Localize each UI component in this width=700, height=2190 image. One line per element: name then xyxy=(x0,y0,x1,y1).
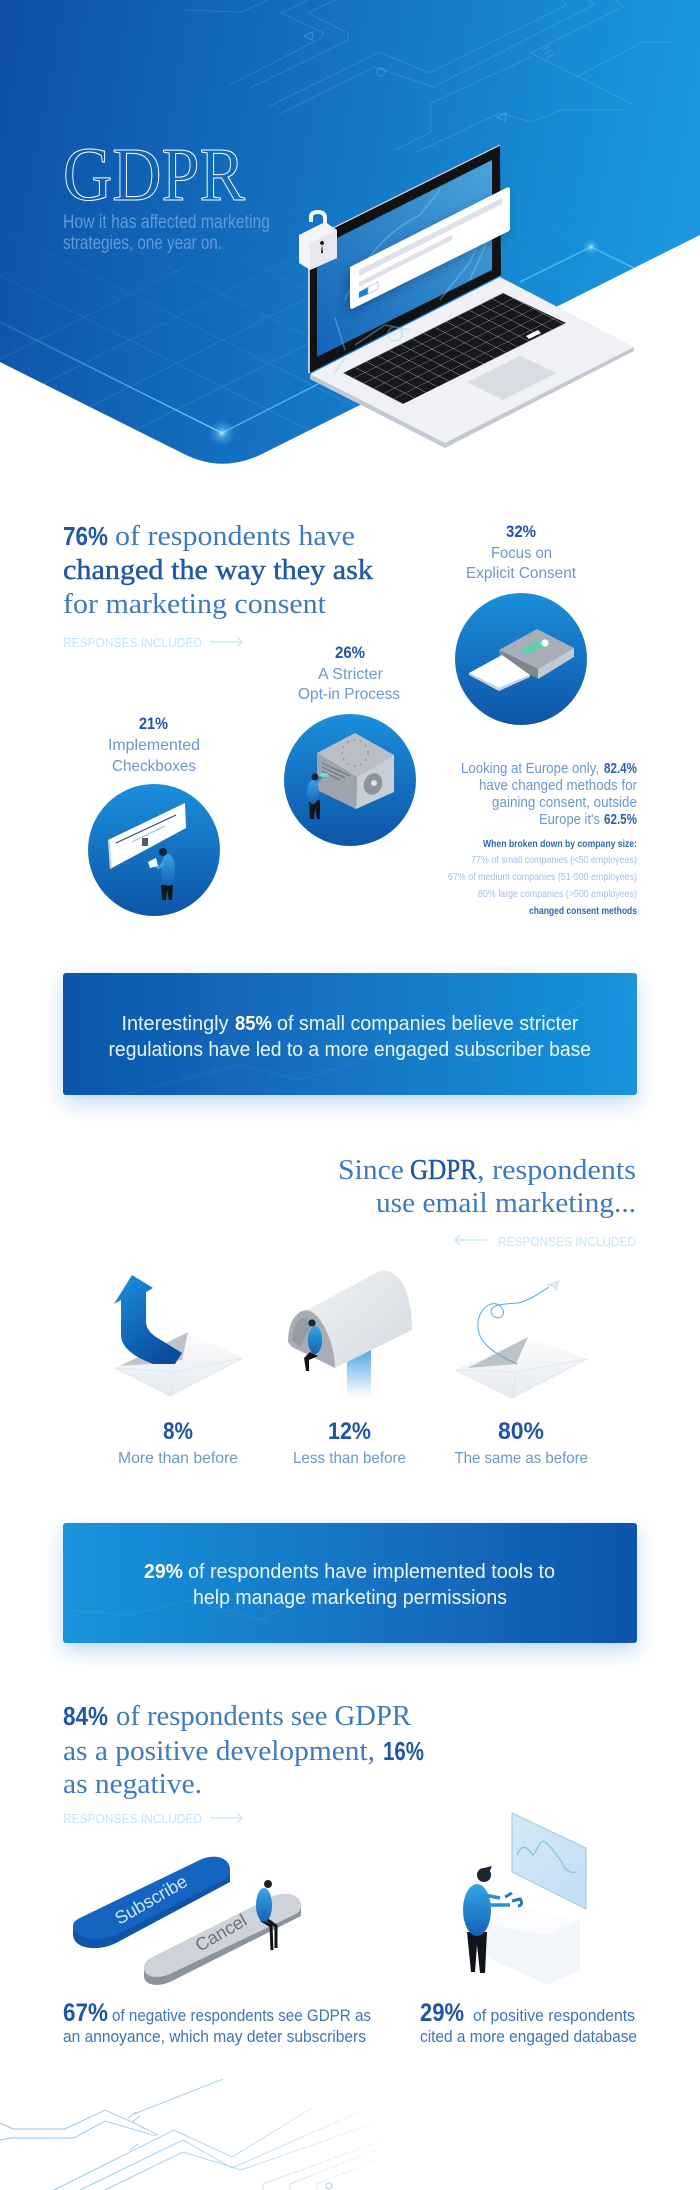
caption: 67% negative: an annoyance, which may deter subscribers xyxy=(63,2027,366,2046)
text block: Europe breakdown xyxy=(448,760,637,917)
text block: Europe breakdown: gaining consent, outside xyxy=(492,794,637,811)
text block: Europe breakdown: 67% of medium companies (51-500 employees) xyxy=(448,871,637,883)
text block: Europe breakdown: changed consent methods xyxy=(529,905,637,917)
stat: 26% stricter opt-in: A Stricter xyxy=(318,666,384,683)
stat: 32% explicit consent: 32% xyxy=(506,522,536,541)
text block: Europe breakdown: Looking at Europe only, xyxy=(461,760,599,777)
stat: 21% checkboxes: 21% xyxy=(139,714,168,733)
caption: 29% positive xyxy=(420,1999,637,2046)
person with tablet xyxy=(148,848,175,900)
consent dialog xyxy=(350,187,510,309)
person standing xyxy=(463,1866,510,1973)
circle icon: safe with person xyxy=(284,714,416,846)
heading: email marketing: use email marketing... xyxy=(376,1187,636,1219)
person at safe xyxy=(307,773,329,819)
text block: Europe breakdown: Europe it's xyxy=(539,811,600,828)
caption: 29% positive: of positive respondents xyxy=(473,2006,635,2025)
illustration: subscribe and cancel buttons xyxy=(73,1857,301,1985)
stat: 26% stricter opt-in: Opt-in Process xyxy=(298,686,400,703)
subscribe button: Subscribe xyxy=(111,1871,191,1928)
callout banner: 29%: 29% xyxy=(144,1561,183,1583)
footer circuit decoration xyxy=(0,2079,411,2190)
text block: Europe breakdown: have changed methods for xyxy=(479,777,637,794)
heading: positive development: of respondents see GDPR xyxy=(116,1700,412,1732)
circle icon: checkbox panel with person xyxy=(88,784,220,916)
stat: 8%: 8% xyxy=(163,1418,193,1445)
cancel button xyxy=(144,1894,301,1985)
subscribe button xyxy=(73,1857,230,1948)
heading: email marketing: GDPR xyxy=(410,1154,478,1186)
text block: Europe breakdown: When broken down by company size: xyxy=(483,838,637,850)
illustration: person at analytics desk xyxy=(463,1813,586,1985)
caption: 67% negative: 67% xyxy=(63,1999,108,2027)
callout banner: 29%: of respondents have implemented tools to xyxy=(188,1561,555,1583)
text block: Europe breakdown: 77% of small companies (<50 employees) xyxy=(471,854,637,866)
stat: 12%: 12% xyxy=(328,1418,371,1445)
cancel button: Cancel xyxy=(192,1910,250,1955)
icon: mailbox with person xyxy=(288,1270,412,1397)
heading: positive development: as negative. xyxy=(63,1768,202,1800)
keyboard xyxy=(343,293,566,404)
heading: consent: changed the way they ask xyxy=(63,554,374,586)
stat: 12% xyxy=(293,1418,406,1467)
subtitle: How it has affected marketing xyxy=(63,212,270,233)
heading: positive development xyxy=(63,1700,424,1800)
laptop base xyxy=(310,277,634,448)
heading: email marketing: , respondents xyxy=(477,1154,636,1186)
responses included arrow 2: RESPONSES INCLUDED xyxy=(498,1234,636,1249)
caption: 29% positive: 29% xyxy=(420,1999,464,2027)
heading: positive development: as a positive development, xyxy=(63,1735,375,1767)
heading: consent: 76% xyxy=(63,521,108,551)
illustration: laptop with consent dialog and padlock xyxy=(299,145,634,448)
stat: 26% stricter opt-in: 26% xyxy=(335,643,365,662)
stat: 80%: 80% xyxy=(498,1418,544,1445)
callout banner: 85%: Interestingly xyxy=(122,1013,228,1035)
caption: 29% positive: cited a more engaged database xyxy=(420,2027,637,2046)
icon: envelope with paper plane xyxy=(455,1280,587,1398)
callout banner: 85%: of small companies believe stricter xyxy=(277,1013,579,1035)
responses included arrow 3: RESPONSES INCLUDED xyxy=(63,1811,202,1826)
text block: Europe breakdown: 62.5% xyxy=(604,811,637,828)
laptop screen xyxy=(309,145,501,373)
stat: 12%: Less than before xyxy=(293,1450,406,1467)
callout banner: 29%: help manage marketing permissions xyxy=(193,1587,507,1609)
heading: email marketing: Since xyxy=(338,1154,404,1186)
caption: 67% negative xyxy=(63,1999,371,2046)
stat: 21% checkboxes xyxy=(108,714,200,775)
icon: envelope with up arrow xyxy=(114,1275,243,1396)
heading: positive development: 84% xyxy=(63,1701,108,1731)
stat: 32% explicit consent: Focus on xyxy=(491,545,552,562)
stat: 80%: The same as before xyxy=(454,1450,588,1467)
subtitle: strategies, one year on. xyxy=(63,233,222,254)
stat: 80% xyxy=(454,1418,588,1467)
hero background panel xyxy=(0,0,700,464)
subtitle xyxy=(63,212,270,254)
stat: 8%: More than before xyxy=(118,1450,238,1467)
stat: 32% explicit consent: Explicit Consent xyxy=(466,565,577,582)
circle icon: switch box with envelope xyxy=(455,593,587,725)
person sitting xyxy=(256,1880,276,1950)
stat: 21% checkboxes: Checkboxes xyxy=(112,758,196,775)
chart screen xyxy=(512,1813,586,1909)
stat: 32% explicit consent xyxy=(466,522,577,582)
stat: 21% checkboxes: Implemented xyxy=(108,737,200,754)
stat: 26% stricter opt-in xyxy=(298,643,400,703)
person in mailbox xyxy=(304,1319,322,1371)
heading: positive development: 16% xyxy=(383,1736,424,1766)
caption: 67% negative: of negative respondents see GDPR as xyxy=(112,2006,371,2025)
callout banner: 85%: 85% xyxy=(235,1013,272,1035)
trackpad xyxy=(467,356,557,400)
keyboard keys xyxy=(505,1893,522,1906)
callout banner: 29% xyxy=(63,1523,637,1643)
text block: Europe breakdown: 82.4% xyxy=(604,760,637,777)
responses included arrow 1: RESPONSES INCLUDED xyxy=(63,635,202,650)
stat: 8% xyxy=(118,1418,238,1467)
heading: consent: of respondents have xyxy=(115,520,355,552)
heading: consent: for marketing consent xyxy=(63,588,326,620)
callout banner: 85%: regulations have led to a more engaged subscriber base xyxy=(108,1039,591,1061)
heading: email marketing xyxy=(338,1154,636,1219)
heading: consent xyxy=(63,520,374,620)
padlock xyxy=(299,212,337,270)
text block: Europe breakdown: 80% large companies (>500 employees) xyxy=(478,888,637,900)
desk xyxy=(487,1905,580,1985)
title: GDPR xyxy=(63,133,245,217)
callout banner: 85% xyxy=(63,973,637,1095)
